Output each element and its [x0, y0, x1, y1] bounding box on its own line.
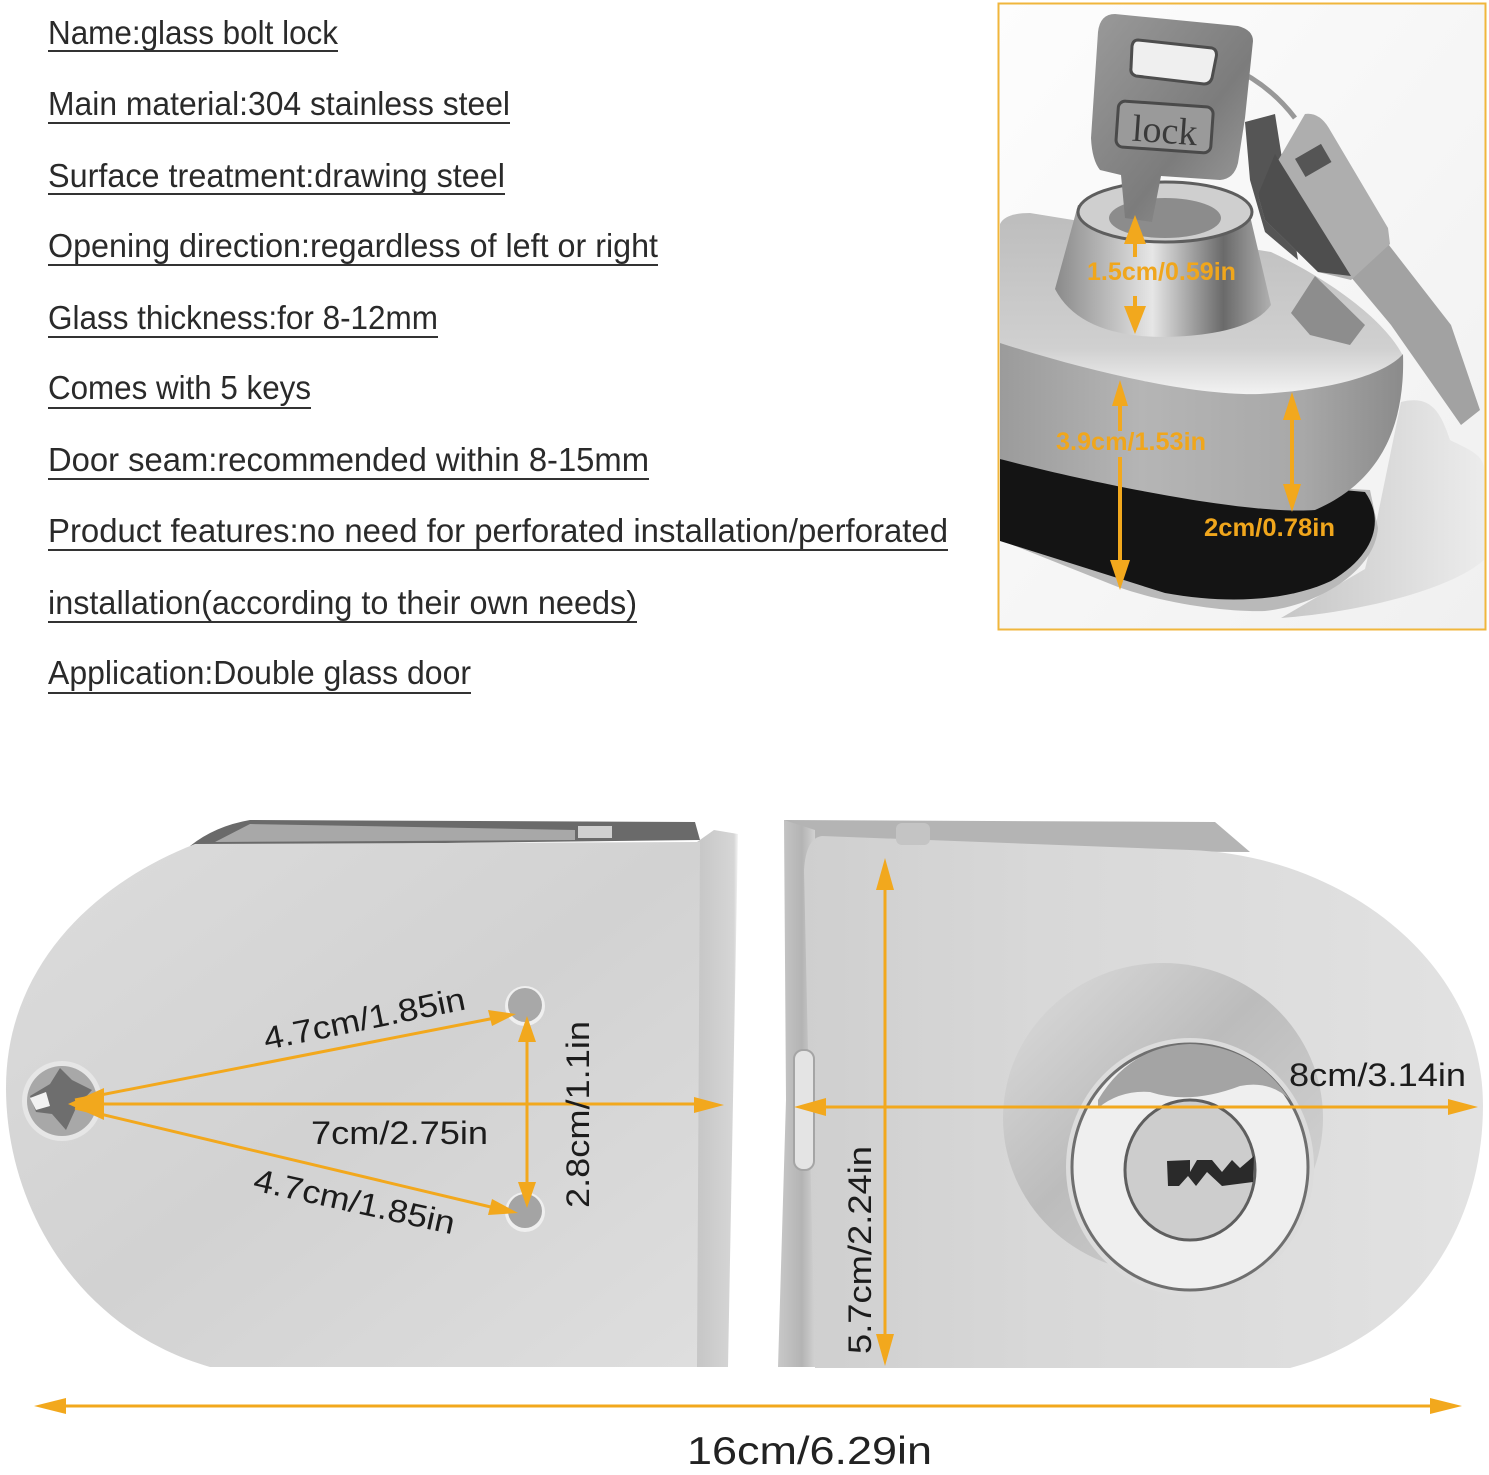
key logo [1115, 101, 1214, 155]
overall width dimension: 16cm/6.29in [687, 1430, 932, 1473]
spec: product features: Product features:no need for perforated installation/perforated [48, 512, 948, 549]
label: horizontal: 7cm/2.75in [311, 1115, 488, 1151]
screw [22, 1061, 102, 1141]
spec: main material: Main material:304 stainless steel [48, 85, 510, 122]
lock front band [1000, 343, 1403, 511]
panel: lock photo with keys [998, 4, 1486, 630]
keyhole [1167, 1156, 1254, 1186]
dimension arrows [794, 858, 1478, 1366]
key shadow block [1291, 276, 1365, 345]
hole: bottom [505, 1192, 545, 1232]
top strip [784, 820, 1250, 852]
key head [1258, 114, 1390, 280]
spec: opening direction: Opening direction:regardless of left or right [48, 227, 658, 264]
inner crescent [1098, 1044, 1290, 1108]
top edge [190, 820, 700, 846]
dimension: 2cm [1204, 392, 1335, 542]
side edge [778, 820, 818, 1367]
label: 8cm: 8cm/3.14in [1289, 1057, 1466, 1093]
blade [1345, 240, 1480, 425]
latch stud [896, 823, 930, 845]
main face [804, 836, 1483, 1368]
spec: door seam: Door seam:recommended within 8-15mm [48, 441, 649, 478]
spec: product features continued: installation(according to their own needs) [48, 584, 637, 621]
label: top diagonal: 4.7cm/1.85in [260, 981, 468, 1057]
spec: application: Application:Double glass door [48, 654, 471, 691]
label: 5.7cm: 5.7cm/2.24in [842, 1146, 878, 1354]
overall width dimension [34, 1398, 1462, 1473]
label: vertical: 2.8cm/1.1in [560, 1021, 596, 1208]
lock knob [1003, 963, 1323, 1296]
spec: surface treatment: Surface treatment:drawing steel [48, 157, 505, 194]
folded side edge [697, 830, 738, 1367]
spec: name: Name:glass bolt lock [48, 14, 338, 51]
dimension: 1.5cm [1087, 215, 1236, 334]
key ring [1195, 63, 1295, 118]
panel: back plate of lock [6, 820, 738, 1367]
dimension: 1.5cm: 1.5cm/0.59in [1087, 258, 1236, 286]
plate [6, 842, 700, 1367]
base plate [1000, 470, 1378, 611]
black gasket [1000, 459, 1375, 599]
panel: front of lock with cylinder [778, 820, 1483, 1368]
spec: glass thickness: Glass thickness:for 8-12mm [48, 299, 438, 336]
specification list [48, 14, 948, 694]
dimension arrows [68, 1010, 724, 1215]
key logo: lock [1131, 108, 1199, 154]
dimension: 3.9cm [1056, 380, 1206, 590]
dimension: 3.9cm: 3.9cm/1.53in [1056, 428, 1206, 456]
cylinder [1055, 205, 1271, 337]
label: bottom diagonal: 4.7cm/1.85in [250, 1162, 458, 1241]
floor shadow [1281, 400, 1484, 618]
side latch [794, 1050, 814, 1170]
spec: keys: Comes with 5 keys [48, 369, 311, 406]
hanging keys [1245, 114, 1298, 260]
lock top surface [1000, 213, 1403, 394]
hole: top [505, 986, 545, 1026]
main key [1091, 14, 1253, 222]
dimension: 2cm: 2cm/0.78in [1204, 514, 1335, 542]
